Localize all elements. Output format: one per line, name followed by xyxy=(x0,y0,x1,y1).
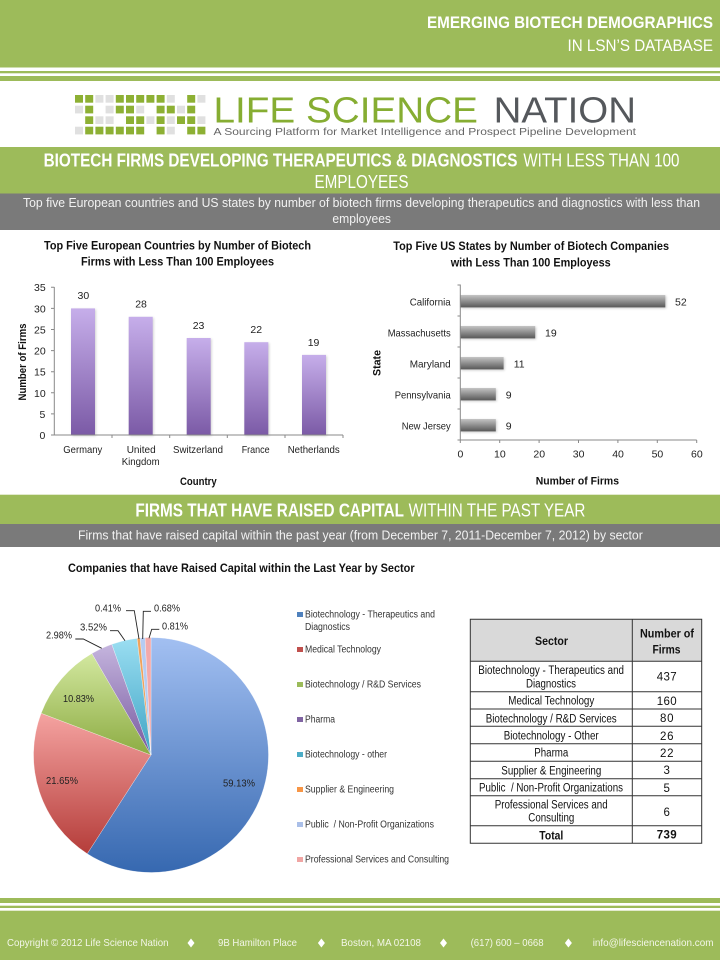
icon: logo square grid xyxy=(75,95,205,134)
footer contact details: info@lifesciencenation.com xyxy=(593,937,714,949)
table header: Firms xyxy=(652,644,680,656)
state labels: New Jersey xyxy=(402,421,451,433)
pie legend: Diagnostics xyxy=(305,622,350,633)
table sector names: Total xyxy=(539,830,563,842)
footer contact details: 9B Hamilton Place xyxy=(218,937,297,949)
percentage labels: 0.41% xyxy=(95,602,121,614)
value labels: 28 xyxy=(135,299,147,311)
percentage labels: 0.68% xyxy=(154,602,180,614)
chart title: Firms with Less Than 100 Employees xyxy=(81,255,274,269)
table sector names: Biotechnology - Other xyxy=(504,731,599,743)
chart title: with Less Than 100 Employess xyxy=(450,256,611,270)
table sector names: Public / Non-Profit Organizations xyxy=(479,783,623,795)
country labels: United xyxy=(127,444,156,456)
value labels: 23 xyxy=(193,320,205,332)
percentage labels: 3.52% xyxy=(80,622,107,634)
logo wordmark xyxy=(214,90,636,138)
percentage labels xyxy=(46,602,255,790)
table counts: 3 xyxy=(664,765,670,777)
header title xyxy=(427,13,713,55)
value labels xyxy=(78,290,320,349)
country labels: Netherlands xyxy=(288,444,340,456)
pie legend: Supplier & Engineering xyxy=(305,785,394,796)
x axis labels: 50 xyxy=(652,449,663,461)
state labels: California xyxy=(410,297,451,309)
x axis labels: 40 xyxy=(612,449,624,461)
country labels: Switzerland xyxy=(173,444,223,456)
table counts: 6 xyxy=(664,807,670,819)
section subheading: top five xyxy=(0,194,720,230)
columns xyxy=(71,308,327,436)
x axis labels: 60 xyxy=(691,449,703,461)
chart title xyxy=(44,238,311,269)
table header: Number of xyxy=(640,629,694,641)
table header xyxy=(470,619,702,661)
footer contact details: Boston, MA 02108 xyxy=(341,937,421,949)
footer contact details xyxy=(7,937,714,949)
x axis labels xyxy=(458,449,703,461)
table counts: 22 xyxy=(660,748,674,760)
logo wordmark: A Sourcing Platform for Market Intelligence and Prospect Pipeline Development xyxy=(214,126,636,138)
pie chart: capital by sector xyxy=(34,602,268,872)
section subheading: raised capital period: Firms that have raised capital within the past year (from December 7, 2011-December 7, 2012) by sector xyxy=(78,528,643,543)
chart: European countries column chart xyxy=(17,238,343,488)
bars xyxy=(460,295,666,432)
section heading: biotech firms xyxy=(0,147,720,194)
y axis labels: 35 xyxy=(34,282,46,294)
value labels: 9 xyxy=(506,421,512,433)
percentage labels: 10.83% xyxy=(63,693,94,705)
pie legend xyxy=(297,609,449,865)
x axis title: Number of Firms xyxy=(536,476,619,488)
country labels xyxy=(63,444,340,468)
y axis labels: 25 xyxy=(34,324,46,336)
axes xyxy=(458,285,697,443)
chart: US states bar chart xyxy=(372,239,703,488)
chart title: Top Five US States by Number of Biotech Companies xyxy=(393,239,669,253)
state labels xyxy=(388,297,451,433)
leader lines xyxy=(75,611,159,648)
logo: Life Science Nation xyxy=(75,90,636,138)
state labels: Massachusetts xyxy=(388,328,451,340)
footer band xyxy=(0,898,720,960)
country labels: Germany xyxy=(63,444,103,456)
table counts xyxy=(657,672,677,842)
x axis title: Country xyxy=(180,476,217,488)
chart title xyxy=(393,239,669,270)
section heading: raised capital xyxy=(0,495,720,524)
pie legend: Professional Services and Consulting xyxy=(305,854,449,865)
value labels: 30 xyxy=(78,290,89,302)
pie legend: Medical Technology xyxy=(305,645,381,656)
footer contact details: Copyright © 2012 Life Science Nation xyxy=(7,937,169,949)
pie slices xyxy=(34,638,268,872)
pie legend: Biotechnology - other xyxy=(305,750,388,761)
chart title: Top Five European Countries by Number of Biotech xyxy=(44,238,311,252)
section heading: biotech firms: BIOTECH FIRMS DEVELOPING THERAPEUTICS & DIAGNOSTICS xyxy=(44,151,517,171)
table sector names: Biotechnology - Therapeutics and xyxy=(478,665,624,677)
value labels: 19 xyxy=(308,337,320,349)
percentage labels: 59.13% xyxy=(223,778,255,790)
pie chart title: Companies that have Raised Capital within the Last Year by Sector xyxy=(68,561,415,575)
pie legend: Public / Non-Profit Organizations xyxy=(305,820,434,831)
state labels: Pennsylvania xyxy=(395,390,451,402)
value labels: 19 xyxy=(545,328,557,340)
axes xyxy=(51,287,343,438)
table counts: 80 xyxy=(660,713,674,725)
percentage labels: 0.81% xyxy=(162,620,188,632)
value labels: 9 xyxy=(506,390,512,402)
table counts: 437 xyxy=(657,672,677,684)
y axis labels: 5 xyxy=(40,409,46,421)
x axis labels: 30 xyxy=(573,449,585,461)
section heading: biotech firms: WITH LESS THAN 100 xyxy=(523,151,679,171)
y axis labels: 10 xyxy=(34,388,46,400)
section heading: raised capital: WITHIN THE PAST YEAR xyxy=(409,500,585,520)
y axis labels: 30 xyxy=(34,304,46,316)
table sector names: Medical Technology xyxy=(508,696,595,708)
percentage labels: 2.98% xyxy=(46,630,72,642)
y axis labels: 0 xyxy=(40,430,46,442)
table header: Sector xyxy=(535,636,568,648)
country labels: Kingdom xyxy=(122,456,160,468)
percentage labels: 21.65% xyxy=(46,775,78,787)
table sector names: Diagnostics xyxy=(526,679,576,691)
table sector names xyxy=(478,665,624,842)
value labels: 52 xyxy=(675,297,687,309)
table sector names: Biotechnology / R&D Services xyxy=(486,714,617,726)
sector table xyxy=(470,619,702,843)
header band xyxy=(0,0,720,81)
section heading: raised capital: FIRMS THAT HAVE RAISED CAPITAL xyxy=(135,500,404,520)
table counts: 739 xyxy=(657,830,677,842)
table sector names: Supplier & Engineering xyxy=(501,766,601,778)
logo wordmark: LIFE SCIENCE xyxy=(214,90,478,131)
y axis title: Number of Firms xyxy=(17,324,29,400)
logo wordmark: NATION xyxy=(494,90,636,131)
value labels: 22 xyxy=(250,324,262,336)
pie legend: Biotechnology / R&D Services xyxy=(305,680,421,691)
section heading: biotech firms: EMPLOYEES xyxy=(314,172,408,192)
country labels: France xyxy=(242,444,270,456)
table sector names: Pharma xyxy=(534,748,569,760)
y axis title: State xyxy=(372,350,384,376)
table counts: 26 xyxy=(660,731,674,743)
x axis labels: 20 xyxy=(533,449,545,461)
y axis labels: 15 xyxy=(34,366,46,378)
table grid xyxy=(470,619,702,843)
y axis labels: 20 xyxy=(34,346,46,358)
table sector names: Consulting xyxy=(528,813,574,825)
value labels xyxy=(506,297,687,433)
section subheading: raised capital period xyxy=(0,524,720,547)
state labels: Maryland xyxy=(410,359,451,371)
x axis labels: 10 xyxy=(494,449,506,461)
table counts: 160 xyxy=(657,696,677,708)
x axis labels: 0 xyxy=(458,449,464,461)
value labels: 11 xyxy=(514,359,525,371)
section subheading: top five: employees xyxy=(332,211,391,226)
pie legend: Pharma xyxy=(305,715,335,726)
y axis labels xyxy=(34,282,46,442)
footer contact details: (617) 600 – 0668 xyxy=(471,937,544,949)
table counts: 5 xyxy=(664,783,670,795)
pie legend: Biotechnology - Therapeutics and xyxy=(305,609,435,620)
table sector names: Professional Services and xyxy=(495,799,608,811)
